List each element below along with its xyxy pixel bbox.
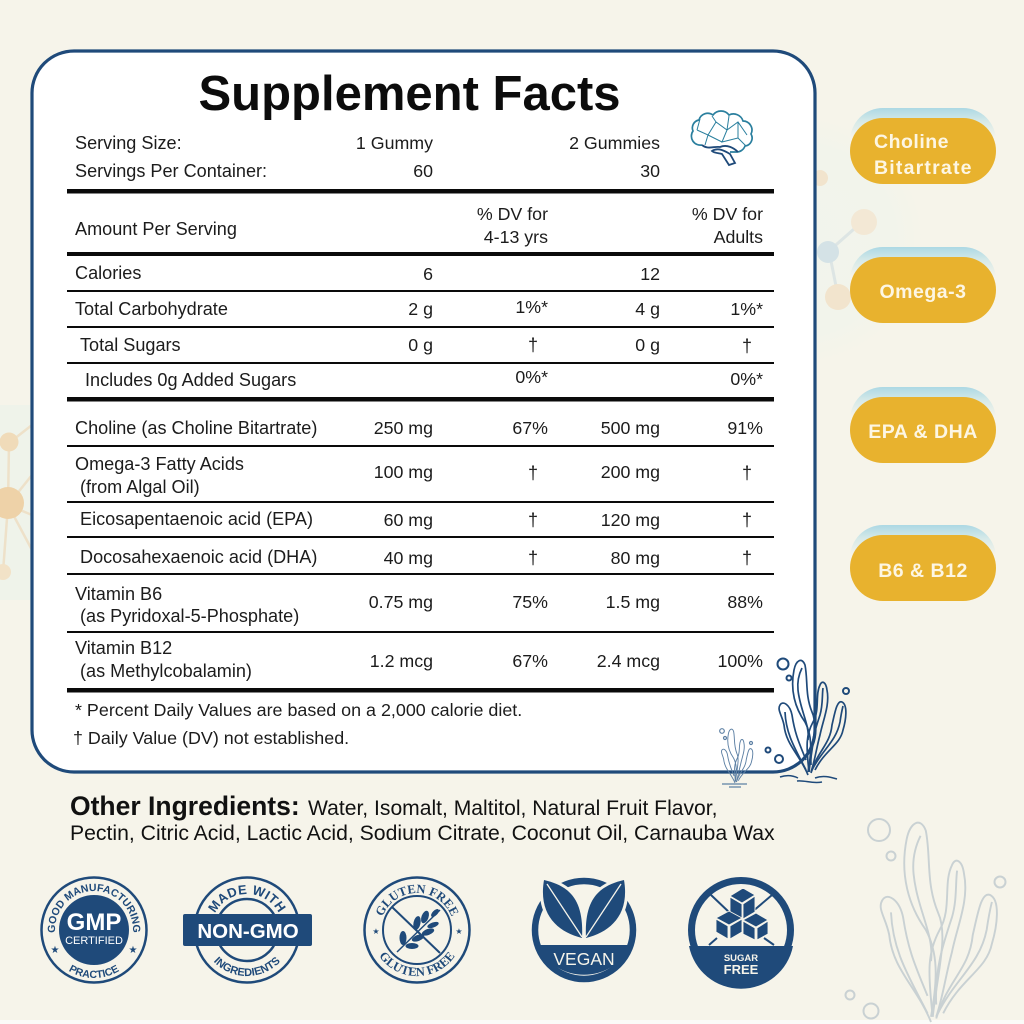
- badge: gluten free: [363, 876, 471, 984]
- badge: GMP certified: PRACTICE: [69, 964, 120, 978]
- row: omega-3: (from Algal Oil): [80, 477, 200, 497]
- badge: non-GMO: MADE WITH: [208, 885, 286, 912]
- table header: Adults: [714, 227, 763, 247]
- row: calories: Calories: [75, 263, 141, 283]
- badge: vegan: [535, 880, 633, 979]
- footnotes: † Daily Value (DV) not established.: [73, 728, 349, 748]
- serving info: 2 Gummies: [569, 133, 660, 153]
- row: vitamin B12: 67%: [512, 651, 548, 671]
- row: total carbohydrate: 2 g: [408, 299, 433, 319]
- badge: sugar free: [689, 880, 793, 989]
- row: calories: 6: [423, 264, 433, 284]
- badge: GMP certified: [40, 876, 148, 984]
- seaweed: card corner small: [720, 729, 753, 787]
- badge: sugar free: SUGAR: [724, 953, 758, 964]
- row: added sugars: 0%*: [730, 369, 763, 389]
- row: choline: [75, 418, 763, 438]
- row: total sugars: [80, 335, 752, 356]
- other ingredients: Pectin, Citric Acid, Lactic Acid, Sodium Citrate, Coconut Oil, Carnauba Wax: [70, 822, 775, 845]
- row: total carbohydrate: 1%*: [730, 299, 763, 319]
- row: total sugars: †: [742, 336, 752, 356]
- row: vitamin B6: Vitamin B6: [75, 584, 162, 604]
- row: omega-3: 100 mg: [374, 462, 433, 482]
- seaweed: bottom right faded: [846, 819, 1006, 1022]
- row: EPA: 60 mg: [384, 510, 433, 530]
- badge: GMP certified: GOOD MANUFACTURING: [48, 884, 140, 932]
- row: vitamin B12: [75, 638, 763, 681]
- pill: omega-3: [850, 247, 996, 323]
- panel: supplement facts card: [32, 51, 815, 772]
- row: total carbohydrate: Total Carbohydrate: [75, 299, 228, 319]
- row: total carbohydrate: 4 g: [635, 299, 660, 319]
- serving info: [75, 133, 660, 181]
- row: choline: 500 mg: [601, 418, 660, 438]
- row: EPA: †: [528, 510, 538, 530]
- table header: % DV for: [477, 204, 548, 224]
- seaweed: card corner large: [766, 658, 849, 783]
- row: choline: 91%: [727, 418, 763, 438]
- badge: gluten free: GLUTEN FREE: [380, 952, 455, 976]
- row: vitamin B12: (as Methylcobalamin): [80, 661, 252, 681]
- badge: non-GMO: INGREDIENTS: [214, 956, 280, 976]
- row: added sugars: 0%*: [515, 367, 548, 387]
- pill: choline bitartrate: [850, 108, 996, 184]
- badge: vegan: VEGAN: [553, 949, 615, 969]
- badge: GMP certified: GMP: [67, 909, 121, 936]
- badge: gluten free: ★: [372, 927, 380, 936]
- row: total sugars: 0 g: [408, 335, 433, 355]
- title: Supplement Facts: [198, 67, 621, 121]
- row: vitamin B6: 1.5 mg: [606, 592, 660, 612]
- serving info: 30: [640, 161, 660, 181]
- row: vitamin B12: 100%: [718, 651, 763, 671]
- row: calories: [75, 263, 660, 284]
- table header: Amount Per Serving: [75, 219, 237, 239]
- row: DHA: 40 mg: [384, 548, 433, 568]
- row: vitamin B12: 1.2 mcg: [370, 651, 433, 671]
- row: DHA: †: [742, 548, 752, 568]
- other ingredients: [70, 791, 775, 845]
- table header: 4-13 yrs: [484, 227, 548, 247]
- other ingredients: Water, Isomalt, Maltitol, Natural Fruit Flavor,: [308, 797, 717, 820]
- row: DHA: 80 mg: [611, 548, 660, 568]
- pill: B6 and B12: [850, 525, 996, 601]
- badge: non-GMO: [183, 876, 312, 984]
- row: EPA: 120 mg: [601, 510, 660, 530]
- row: DHA: †: [528, 548, 538, 568]
- row: omega-3: †: [742, 463, 752, 483]
- row: added sugars: [85, 367, 763, 390]
- pill: EPA and DHA: EPA & DHA: [868, 421, 978, 443]
- row: vitamin B6: 88%: [727, 592, 763, 612]
- row: EPA: [80, 509, 752, 530]
- table header: % DV for: [692, 204, 763, 224]
- row: total sugars: 0 g: [635, 335, 660, 355]
- row: omega-3: †: [528, 463, 538, 483]
- row: omega-3: [75, 454, 752, 497]
- background molecule: right: [675, 115, 925, 365]
- serving info: Servings Per Container:: [75, 161, 267, 181]
- badge: sugar free: FREE: [724, 962, 759, 977]
- row: vitamin B12: Vitamin B12: [75, 638, 172, 658]
- badge: non-GMO: NON-GMO: [197, 920, 299, 943]
- pill: B6 and B12: B6 & B12: [878, 560, 968, 582]
- row: choline: Choline (as Choline Bitartrate): [75, 418, 317, 438]
- footnotes: [73, 700, 522, 748]
- pill: choline bitartrate: Choline: [874, 131, 949, 153]
- row: vitamin B12: 2.4 mcg: [597, 651, 660, 671]
- serving info: Serving Size:: [75, 133, 182, 153]
- row: vitamin B6: (as Pyridoxal-5-Phosphate): [80, 606, 299, 626]
- row: total carbohydrate: 1%*: [515, 297, 548, 317]
- badge: gluten free: GLUTEN FREE: [376, 884, 458, 916]
- row: total sugars: Total Sugars: [80, 335, 181, 355]
- badge: GMP certified: ★: [129, 945, 138, 956]
- row: choline: 67%: [512, 418, 548, 438]
- row: vitamin B6: 0.75 mg: [369, 592, 433, 612]
- row: DHA: [80, 547, 752, 568]
- row: EPA: Eicosapentaenoic acid (EPA): [80, 509, 313, 529]
- row: vitamin B6: [75, 584, 763, 626]
- pill: omega-3: Omega-3: [880, 281, 966, 303]
- row: total sugars: †: [528, 335, 538, 355]
- row: added sugars: Includes 0g Added Sugars: [85, 370, 296, 390]
- other ingredients: Other Ingredients:: [70, 791, 300, 821]
- row: DHA: Docosahexaenoic acid (DHA): [80, 547, 317, 567]
- background molecule: left: [0, 405, 32, 600]
- pill: EPA and DHA: [850, 387, 996, 463]
- serving info: 1 Gummy: [356, 133, 433, 153]
- row: EPA: †: [742, 510, 752, 530]
- table header: [75, 204, 763, 247]
- serving info: 60: [413, 161, 433, 181]
- badge: GMP certified: CERTIFIED: [65, 935, 123, 947]
- pill: choline bitartrate: Bitartrate: [874, 157, 972, 179]
- icon: brain: [691, 111, 752, 165]
- row: vitamin B6: 75%: [512, 592, 548, 612]
- row: omega-3: 200 mg: [601, 462, 660, 482]
- badge: gluten free: ★: [455, 927, 463, 936]
- table rules: [67, 189, 774, 692]
- badge: GMP certified: ★: [51, 945, 60, 956]
- row: calories: 12: [640, 264, 660, 284]
- footnotes: * Percent Daily Values are based on a 2,000 calorie diet.: [75, 700, 522, 720]
- row: choline: 250 mg: [374, 418, 433, 438]
- row: omega-3: Omega-3 Fatty Acids: [75, 454, 244, 474]
- row: total carbohydrate: [75, 297, 763, 319]
